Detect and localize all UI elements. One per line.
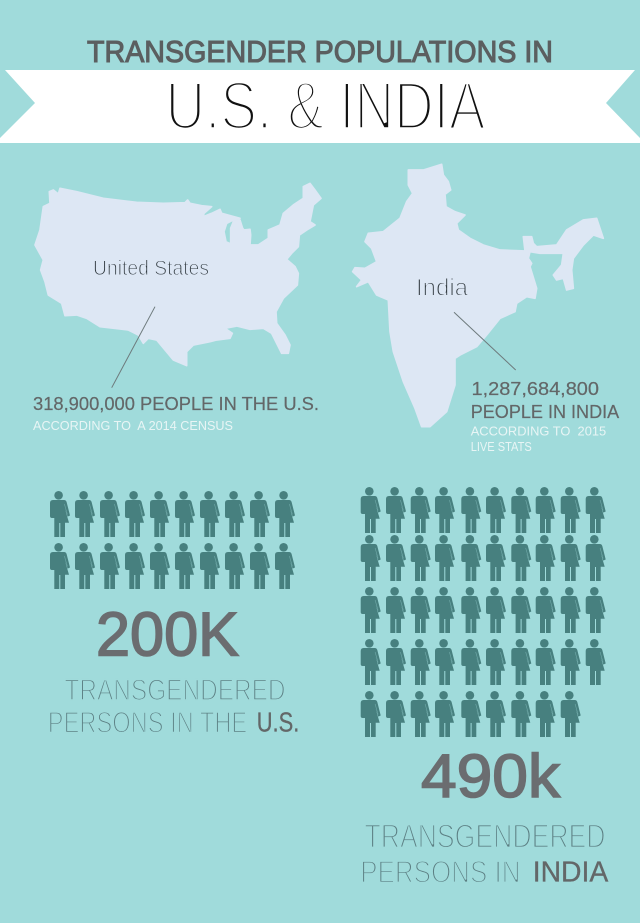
label: United States: United States xyxy=(93,256,209,280)
map: India xyxy=(353,164,603,427)
pictogram: U.S. transgender persons xyxy=(50,491,295,589)
leader line: India xyxy=(454,312,516,370)
India population text: 1,287,684,800 xyxy=(472,378,599,399)
U.S. population source: ACCORDING TO A 2014 CENSUS xyxy=(33,418,233,433)
India population text xyxy=(471,378,620,454)
caption: transgendered persons in the U.S. xyxy=(48,674,299,740)
map: United States xyxy=(35,183,321,366)
caption: transgendered persons in India: PERSONS IN xyxy=(360,854,520,890)
title: first line: TRANSGENDER POPULATIONS IN xyxy=(87,34,553,69)
ribbon banner with title xyxy=(0,68,640,144)
India population source xyxy=(471,424,606,454)
India population source: LIVE STATS xyxy=(471,439,532,454)
U.S. population text xyxy=(33,393,319,433)
stat: 490k: 490k xyxy=(421,742,561,810)
caption: transgendered persons in the U.S.: PERSONS IN THE xyxy=(48,706,247,740)
leader line: United States xyxy=(112,307,155,388)
caption: transgendered persons in the U.S.: U.S. xyxy=(257,707,299,738)
pictogram: India transgender persons xyxy=(361,487,606,737)
title: U.S. & India: U.S. & INDIA xyxy=(166,68,486,144)
caption: transgendered persons in the U.S.: TRANSGENDERED xyxy=(64,674,286,707)
label: India: India xyxy=(416,274,469,301)
caption: transgendered persons in India: INDIA xyxy=(533,857,609,889)
stat: 200K: 200K xyxy=(96,600,239,670)
caption: transgendered persons in India xyxy=(360,818,609,890)
U.S. population text: 318,900,000 PEOPLE IN THE U.S. xyxy=(33,393,319,414)
India population text: PEOPLE IN INDIA xyxy=(471,401,620,422)
India population source: ACCORDING TO 2015 xyxy=(471,424,606,439)
